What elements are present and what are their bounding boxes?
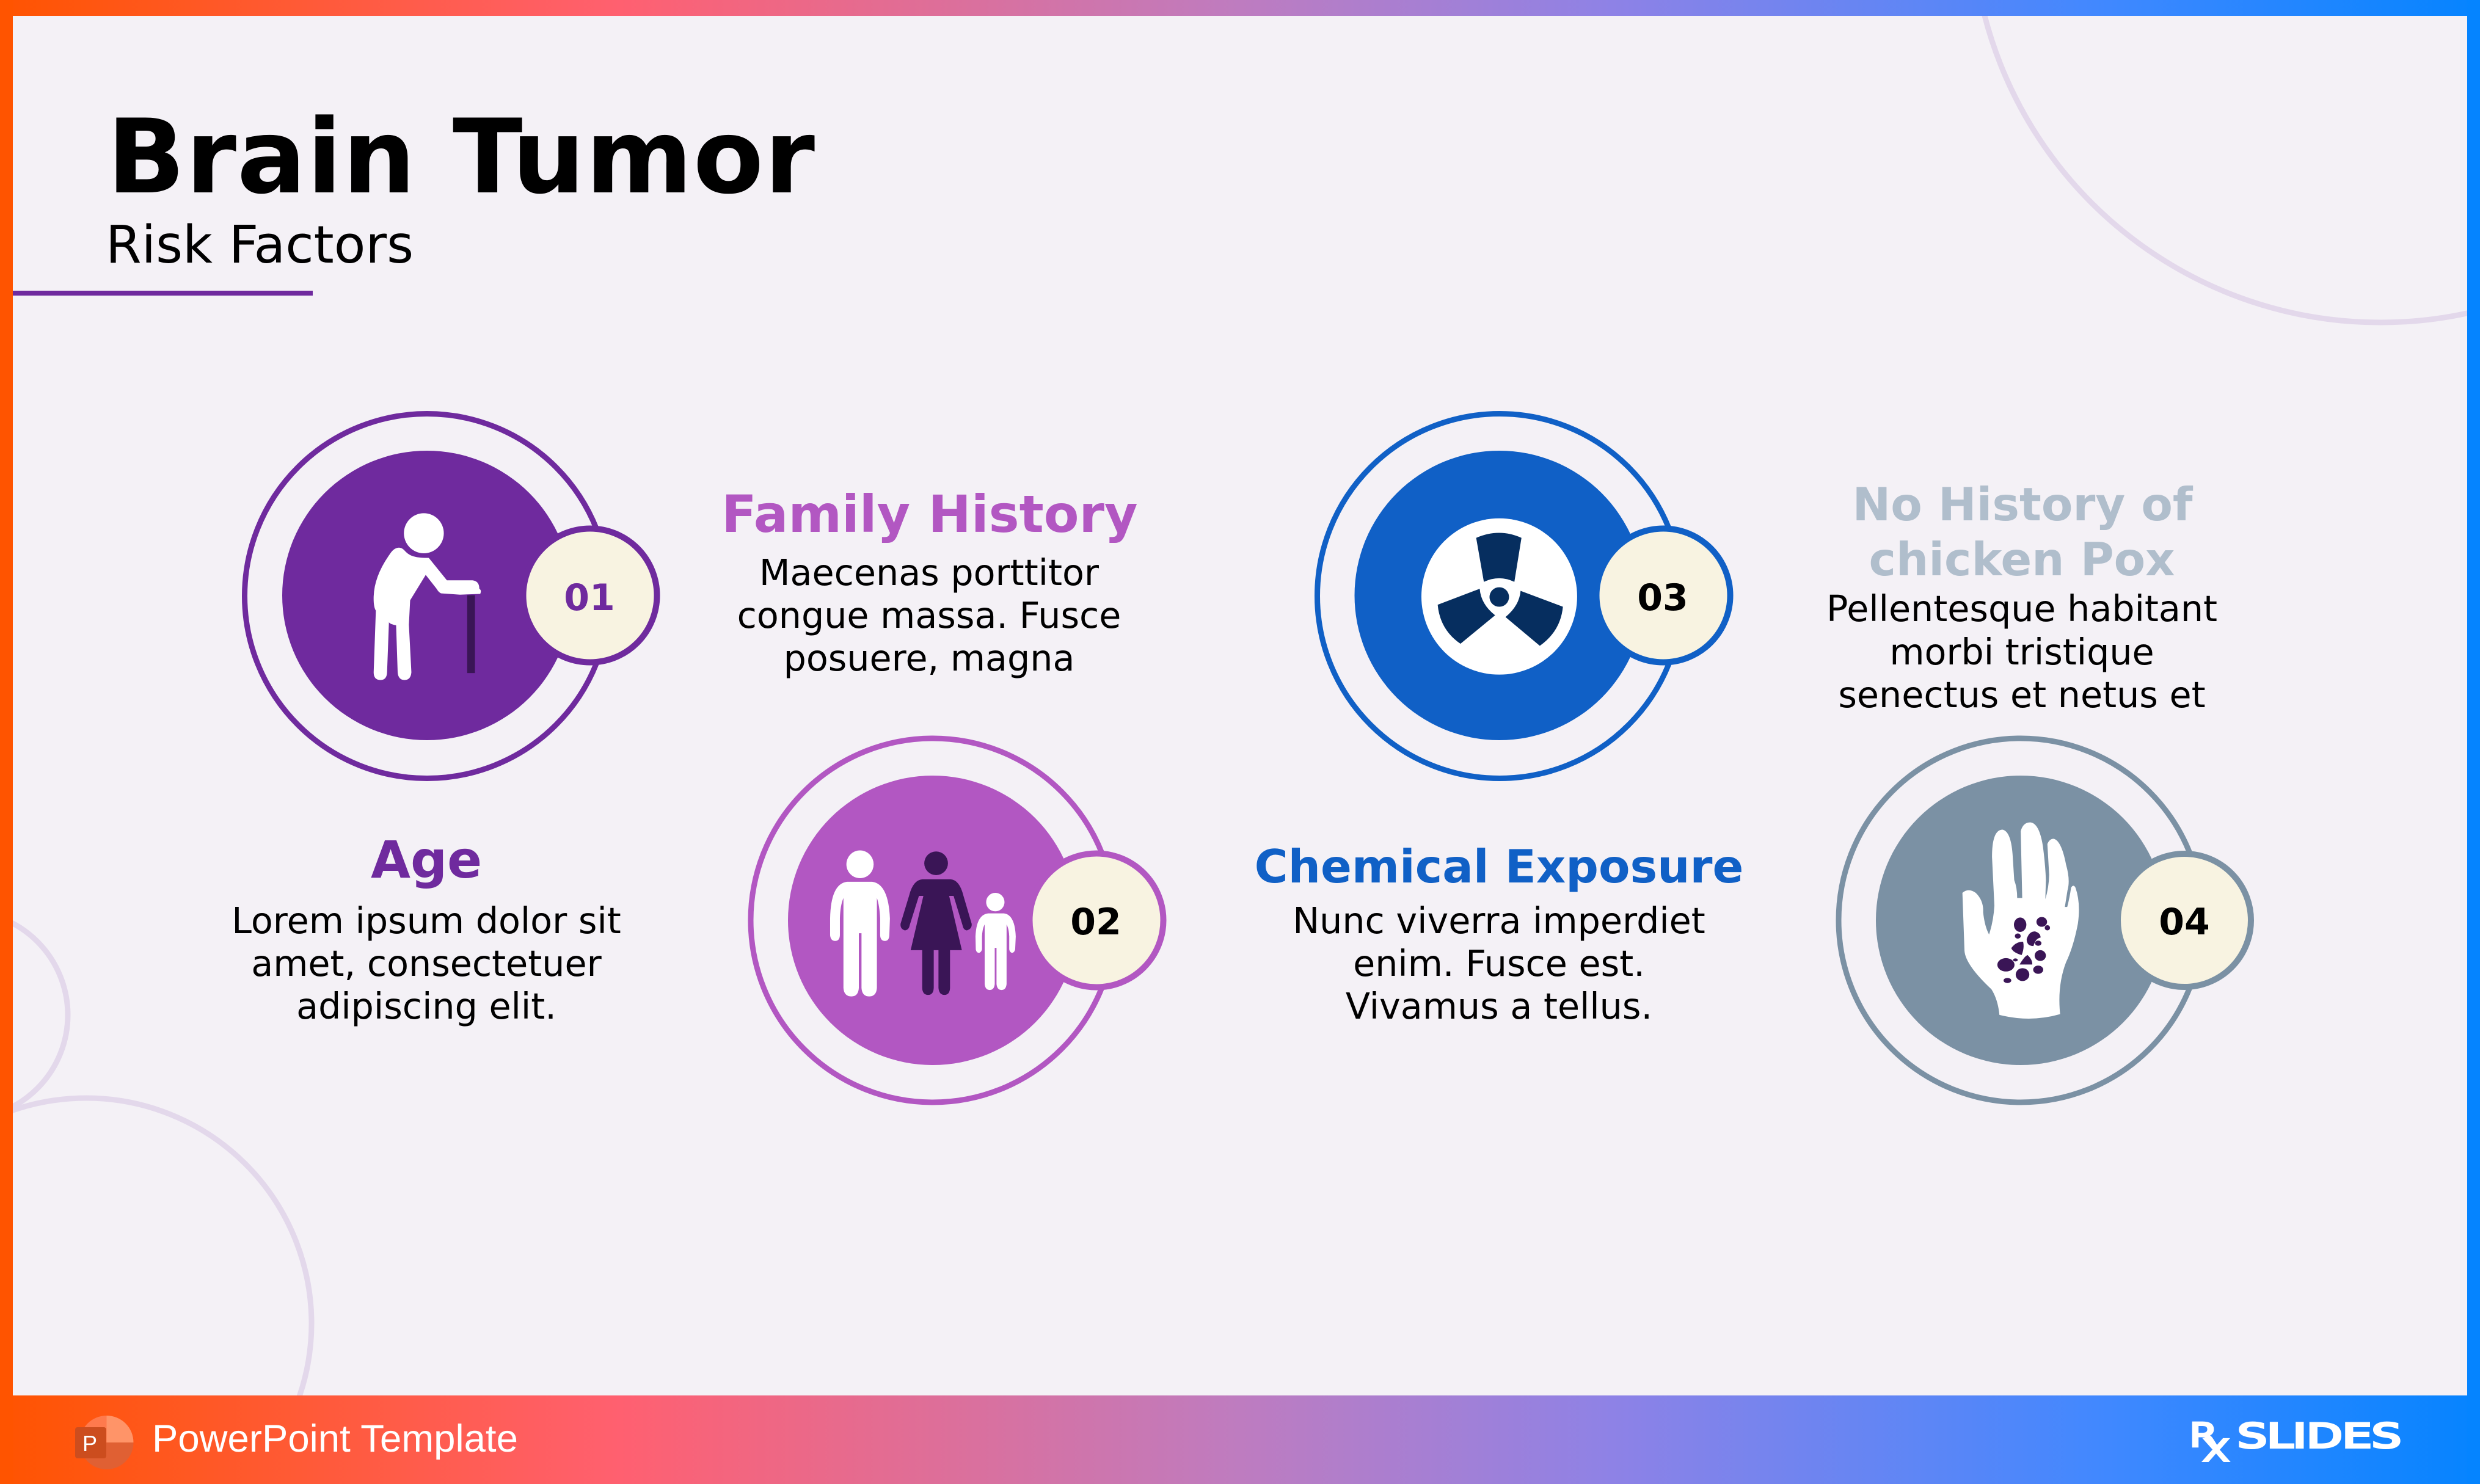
footer gradient bar bbox=[0, 1395, 2480, 1484]
footer label: PowerPoint Template bbox=[152, 1417, 518, 1460]
text block: chicken pox: senectus et netus et bbox=[1838, 674, 2206, 716]
text block: family history bbox=[721, 484, 1138, 679]
badge 02: 02 bbox=[1070, 901, 1121, 944]
icon: family bbox=[830, 851, 1016, 997]
text block: chemical exposure: enim. Fusce est. bbox=[1353, 943, 1645, 984]
text block: age bbox=[232, 830, 621, 1027]
badge 01: 01 bbox=[564, 577, 615, 619]
badge 02 bbox=[1030, 854, 1163, 987]
text block: chicken pox bbox=[1826, 478, 2217, 716]
ring bbox=[1317, 414, 1682, 778]
subtitle: Risk Factors bbox=[106, 215, 414, 275]
badge 04: 04 bbox=[2159, 901, 2210, 944]
disc bbox=[1876, 776, 2165, 1065]
text block: chemical exposure: Chemical Exposure bbox=[1255, 840, 1743, 893]
text block: age: amet, consectetuer bbox=[251, 943, 602, 984]
icon: powerpoint logo bbox=[75, 1416, 133, 1469]
title: Brain Tumor bbox=[107, 97, 815, 217]
text block: age: Lorem ipsum dolor sit bbox=[232, 900, 621, 942]
brand logo: x bbox=[2201, 1424, 2231, 1472]
disc bbox=[788, 776, 1078, 1065]
text block: chicken pox: morbi tristique bbox=[1889, 631, 2154, 673]
text block: chicken pox: Pellentesque habitant bbox=[1826, 588, 2217, 630]
text block: age: adipiscing elit. bbox=[296, 986, 556, 1027]
brand logo: R bbox=[2189, 1416, 2218, 1455]
badge 03 bbox=[1597, 529, 1730, 662]
text block: age: Age bbox=[371, 830, 482, 890]
icon: hand with spots bbox=[1963, 823, 2079, 1019]
panel: 01 age bbox=[244, 414, 657, 778]
title underline bbox=[13, 291, 313, 296]
panel: 02 family history bbox=[751, 738, 1163, 1102]
icon: elderly person with cane bbox=[374, 513, 481, 680]
ring bbox=[751, 738, 1115, 1102]
panel: 04 chicken pox bbox=[1839, 738, 2251, 1102]
ring bbox=[244, 414, 610, 778]
badge 01 bbox=[523, 529, 657, 662]
disc bbox=[1355, 451, 1644, 740]
badge 03: 03 bbox=[1637, 577, 1688, 619]
text block: chicken pox: No History of bbox=[1852, 478, 2194, 531]
text block: chemical exposure bbox=[1255, 840, 1743, 1027]
panel: 03 chemical exposure bbox=[1317, 414, 1730, 778]
left edge bar bbox=[0, 0, 13, 1484]
brand logo bbox=[2189, 1416, 2401, 1472]
icon: powerpoint logo: P bbox=[82, 1431, 97, 1456]
brand logo: SLIDES bbox=[2237, 1417, 2401, 1455]
text block: chicken pox: chicken Pox bbox=[1869, 533, 2175, 586]
text block: family history: congue massa. Fusce bbox=[737, 595, 1121, 636]
ring bbox=[1839, 738, 2203, 1102]
text block: chemical exposure: Nunc viverra imperdiet bbox=[1293, 900, 1705, 942]
right edge bar bbox=[2467, 0, 2480, 1484]
text block: family history: Family History bbox=[721, 484, 1138, 544]
text block: family history: posuere, magna bbox=[784, 638, 1074, 679]
icon: radiation symbol bbox=[1421, 518, 1577, 675]
text block: family history: Maecenas porttitor bbox=[759, 552, 1100, 594]
text block: chemical exposure: Vivamus a tellus. bbox=[1346, 986, 1652, 1027]
top gradient bar bbox=[0, 0, 2480, 16]
disc bbox=[282, 451, 572, 740]
badge 04 bbox=[2118, 854, 2251, 987]
